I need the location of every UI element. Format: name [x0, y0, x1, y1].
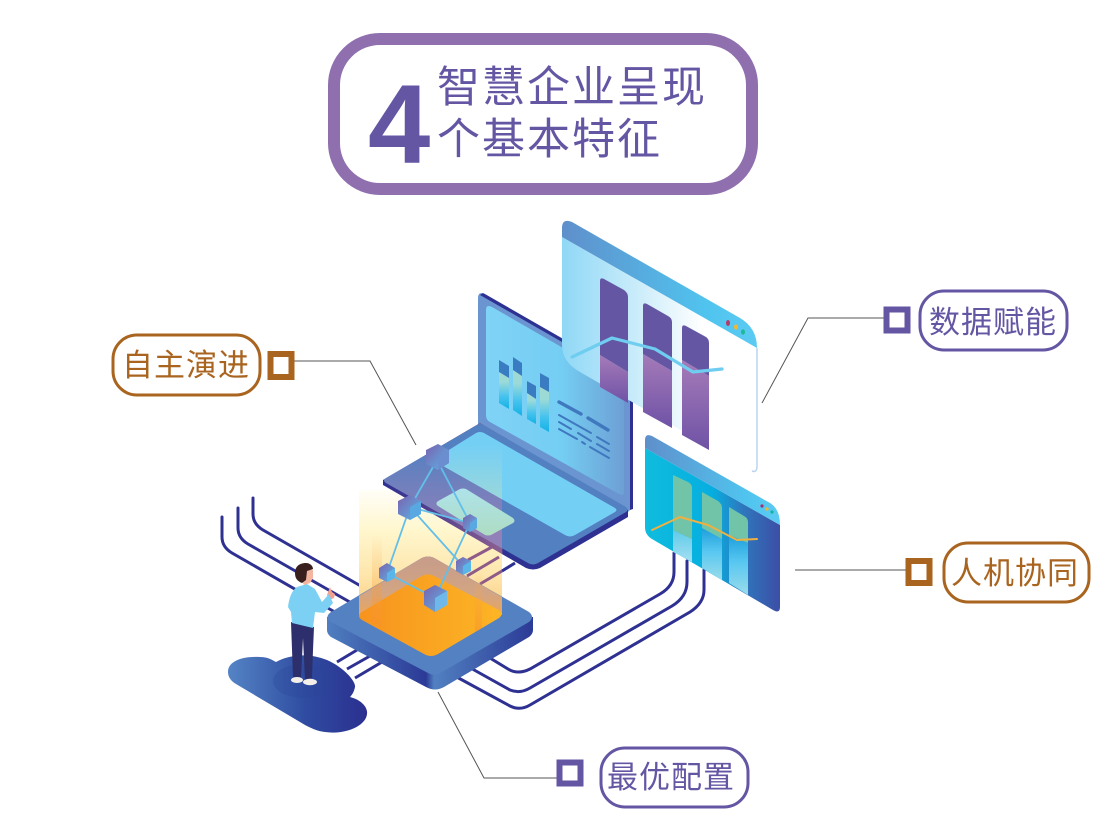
- laptop deck: [384, 424, 628, 564]
- window border: [752, 348, 757, 471]
- screen bar chart: [499, 357, 549, 432]
- screen display: [486, 306, 624, 495]
- glow on chip: [359, 556, 502, 615]
- callout: 数据赋能: [762, 291, 1067, 403]
- bullet square: [560, 762, 580, 784]
- light stripe right: [475, 570, 482, 632]
- leader line: [438, 692, 557, 778]
- glow column backdrop: [359, 490, 502, 620]
- label text: 人机协同: [951, 556, 1079, 591]
- label text: 数据赋能: [929, 305, 1057, 340]
- shoes: [291, 677, 317, 685]
- callout: 自主演进: [113, 335, 416, 445]
- bullet square: [908, 561, 930, 583]
- deck tint: [384, 456, 502, 548]
- node left: [398, 495, 421, 520]
- leader line: [293, 361, 416, 445]
- chip side: [327, 617, 533, 690]
- leader line: [762, 318, 884, 403]
- window dots: [760, 504, 774, 514]
- person: [288, 563, 335, 685]
- title frame: [334, 39, 752, 189]
- laptop screen: [478, 293, 633, 512]
- hair: [295, 563, 313, 583]
- network graph: [379, 444, 477, 612]
- wires: upper left: [222, 498, 366, 615]
- trend line: [572, 338, 722, 372]
- screen edge: [480, 293, 633, 510]
- wires: cloud to chip: [337, 650, 382, 678]
- node lower left: [379, 563, 395, 582]
- face: [301, 566, 313, 585]
- node right: [463, 514, 477, 532]
- callout: 人机协同: [795, 543, 1089, 602]
- torso: [288, 584, 333, 628]
- wires: chip to laptop: [467, 547, 515, 584]
- teal bars: [673, 475, 748, 595]
- bullet square: [886, 310, 908, 330]
- central chip: [327, 533, 533, 690]
- window dots: [726, 320, 745, 335]
- label text: 自主演进: [122, 348, 250, 383]
- label pill: [944, 543, 1089, 602]
- window body: [562, 237, 757, 471]
- shadow under feet: [273, 664, 333, 698]
- legs: [291, 622, 314, 680]
- callout: 最优配置: [438, 692, 748, 807]
- label text: 最优配置: [607, 760, 735, 795]
- title: [334, 39, 752, 189]
- title text: 智慧企业呈现: [437, 64, 707, 112]
- window body: [645, 448, 780, 611]
- chip top: [328, 556, 532, 675]
- label pill: [601, 748, 748, 807]
- touchpad: [436, 488, 514, 536]
- laptop: [383, 293, 633, 570]
- label pill: [113, 335, 260, 395]
- node lower right: [456, 557, 471, 575]
- light stripe left: [372, 533, 382, 628]
- keyboard area: [434, 432, 616, 536]
- window header: [562, 221, 757, 348]
- floating window: purple chart: [562, 221, 757, 471]
- wires: chip to window: [453, 553, 704, 708]
- screen text lines: [559, 402, 609, 458]
- keyboard tint: [444, 456, 502, 500]
- title text line 2: 个基本特征: [437, 116, 662, 164]
- leader line: [795, 569, 906, 571]
- node front: [424, 585, 447, 612]
- cloud base: [228, 655, 367, 733]
- purple bars: [600, 278, 709, 450]
- numeral 4: 4: [368, 62, 430, 187]
- laptop base: [383, 423, 628, 570]
- floating window: teal chart: [645, 435, 780, 611]
- trend line: [652, 517, 757, 540]
- hand: [327, 587, 335, 600]
- bullet square: [270, 354, 292, 377]
- node top: [426, 444, 449, 470]
- window header: [645, 435, 780, 525]
- orange pad: [359, 574, 502, 656]
- label pill: [920, 291, 1067, 350]
- network links: [387, 460, 470, 598]
